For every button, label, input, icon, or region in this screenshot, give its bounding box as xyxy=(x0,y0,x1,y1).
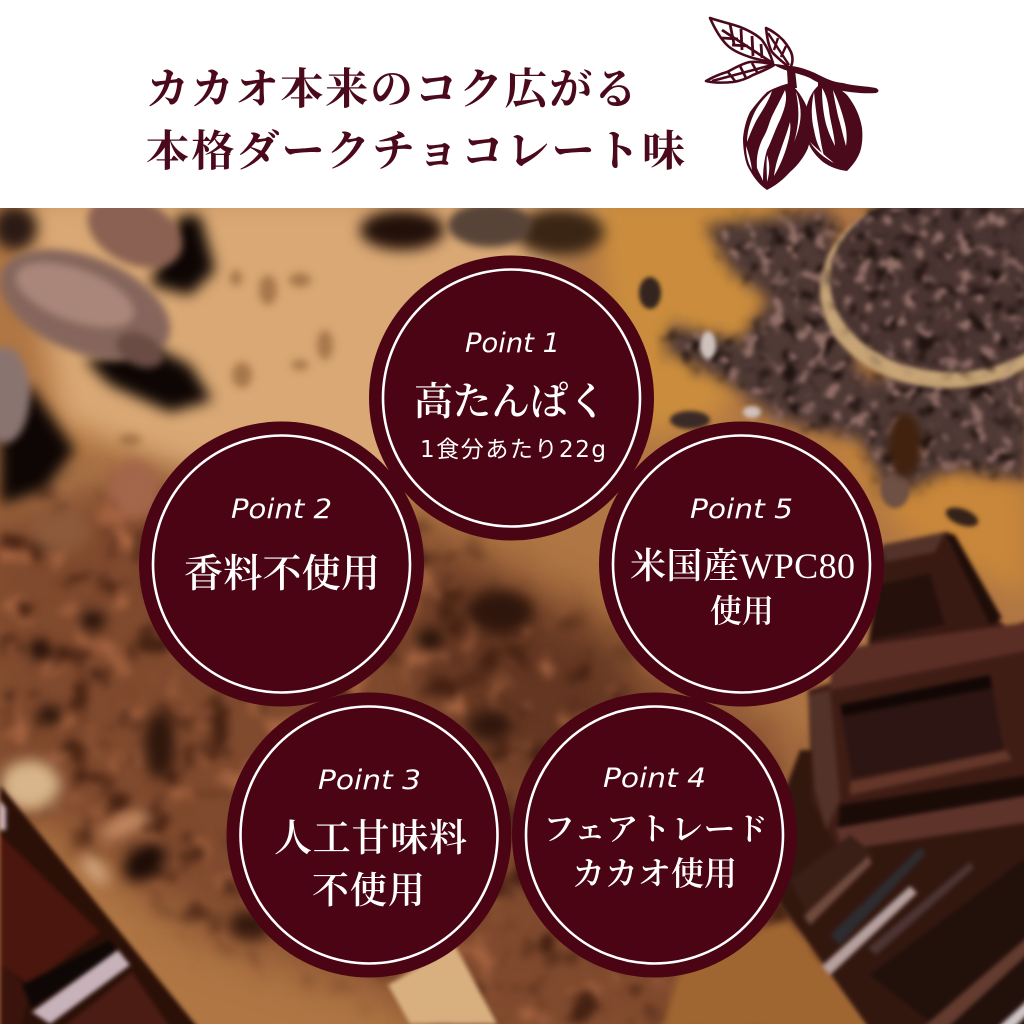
leaf top right xyxy=(766,28,792,68)
stems xyxy=(787,70,828,90)
leaf lower xyxy=(706,62,774,83)
title: カカオ本来のコク広がる xyxy=(146,66,637,114)
cocoa nibs pile xyxy=(639,210,1024,530)
leaf top left xyxy=(710,18,773,63)
wood board light areas xyxy=(20,195,1024,600)
pod right xyxy=(805,83,862,171)
badge: Point 1: Point 1 xyxy=(465,328,560,359)
badge: Point 3: 人工甘味料 xyxy=(274,818,467,860)
badge: Point 5: Point 5 xyxy=(690,494,793,525)
cocoa beans xyxy=(0,182,604,514)
badge: Point 1 xyxy=(369,256,654,540)
chocolate bar bottom left xyxy=(0,785,200,1024)
badge: Point 4: Point 4 xyxy=(603,763,706,794)
spilled powder flecks on board xyxy=(119,270,333,446)
wooden spoon handle xyxy=(388,945,497,1024)
branch xyxy=(773,64,878,93)
badge: Point 4: カカオ使用 xyxy=(572,856,737,893)
badge: Point 3: 不使用 xyxy=(312,870,425,912)
badge: Point 4: フェアトレード xyxy=(543,811,768,847)
cocoa powder mound xyxy=(0,466,830,1024)
title: 本格ダークチョコレート味 xyxy=(146,128,685,176)
badge: Point 3: Point 3 xyxy=(318,765,421,796)
main frame xyxy=(808,620,1024,850)
title xyxy=(146,66,685,176)
icon: cacao branch with two pods xyxy=(706,18,878,190)
badge: Point 1: 1食分あたり22g xyxy=(420,437,606,463)
upper piece xyxy=(865,530,1006,648)
badge: Point 2: Point 2 xyxy=(231,494,332,525)
badge: Point 3 xyxy=(226,692,512,978)
header band xyxy=(0,0,1024,208)
badge: Point 5: 米国産WPC80 xyxy=(630,546,855,586)
wooden bowl of nibs xyxy=(820,186,1024,388)
badge: Point 5 xyxy=(599,422,884,706)
orange wood corner beside chocolate xyxy=(660,920,870,1024)
lower pieces xyxy=(839,834,863,850)
badge: Point 1: 高たんぱく xyxy=(414,381,607,424)
badge: Point 2: 香料不使用 xyxy=(184,553,380,596)
badge: Point 4 xyxy=(512,692,797,978)
pod left xyxy=(743,83,811,190)
badge: Point 5: 使用 xyxy=(710,593,774,629)
badge: Point 2 xyxy=(139,422,424,706)
chocolate bars right xyxy=(778,532,1024,1024)
